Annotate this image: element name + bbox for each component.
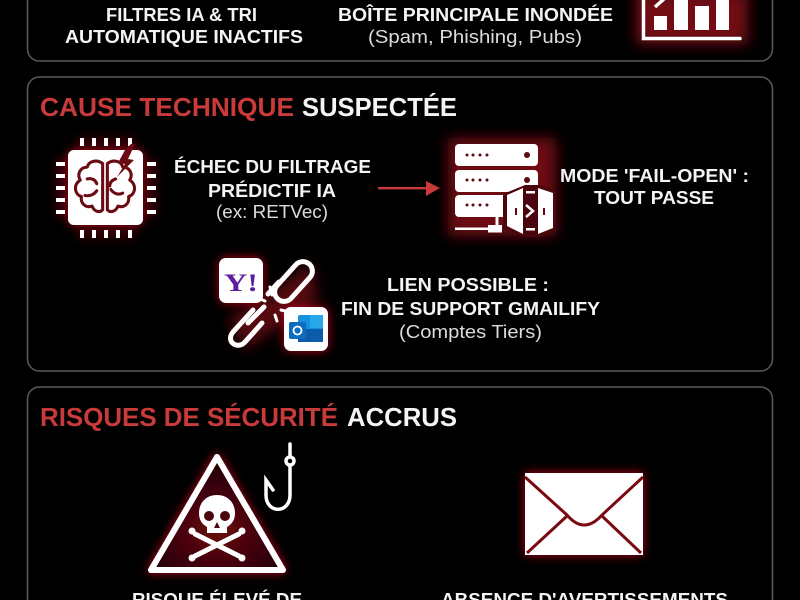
- icon: broken chain with Yahoo and Outlook: [219, 258, 328, 351]
- text: boite principale: BOÎTE PRINCIPALE INONDÉE: [338, 4, 613, 25]
- chain links: [230, 258, 316, 345]
- icon: fishing hook: [266, 444, 294, 509]
- icon: envelope: [525, 473, 643, 555]
- text: mode fail-open: TOUT PASSE: [594, 187, 714, 208]
- text: echec du filtrage: [174, 156, 371, 222]
- lightning crack: [117, 144, 135, 177]
- icon: warning triangle with skull: [151, 457, 283, 570]
- text: mode fail-open: MODE 'FAIL-OPEN' :: [560, 165, 749, 186]
- outlook tile: [284, 307, 328, 351]
- text: lien possible: [341, 274, 601, 342]
- text: echec du filtrage: (ex: RETVec): [216, 201, 328, 222]
- text: lien possible: (Comptes Tiers): [399, 321, 542, 342]
- icon: server with open door: [448, 138, 556, 237]
- yahoo tile: Y!: [224, 270, 258, 297]
- text: lien possible: FIN DE SUPPORT GMAILIFY: [341, 298, 601, 319]
- heading: cause technique suspectee: CAUSE TECHNIQUE: [40, 92, 294, 122]
- panel: top results: [28, 0, 772, 61]
- icon: bar chart: [636, 0, 748, 44]
- text: filtres IA: FILTRES IA & TRI: [106, 4, 257, 25]
- open door: [503, 185, 556, 237]
- text: boite principale: (Spam, Phishing, Pubs): [368, 26, 582, 47]
- text: echec du filtrage: ÉCHEC DU FILTRAGE: [174, 156, 371, 177]
- heading: cause technique suspectee: [40, 92, 457, 122]
- panel: risques de securite: [28, 387, 772, 600]
- heading: risques de securite accrus: ACCRUS: [347, 402, 457, 432]
- heading: cause technique suspectee: SUSPECTÉE: [302, 92, 457, 122]
- text: mode fail-open: [560, 165, 749, 208]
- text: filtres IA: [65, 4, 303, 47]
- heading: risques de securite accrus: RISQUES DE SÉCURITÉ: [40, 402, 338, 432]
- text: filtres IA: AUTOMATIQUE INACTIFS: [65, 26, 303, 47]
- text: lien possible: LIEN POSSIBLE :: [387, 274, 549, 295]
- arrow: [378, 181, 440, 196]
- break sparks: [258, 287, 289, 321]
- text: boite principale: [338, 4, 613, 47]
- brain outline: [75, 161, 135, 212]
- text: echec du filtrage: PRÉDICTIF IA: [208, 180, 336, 201]
- icon: AI chip with cracked brain: [56, 138, 156, 238]
- panel: cause technique: [28, 77, 772, 371]
- skull and crossbones: [188, 495, 246, 562]
